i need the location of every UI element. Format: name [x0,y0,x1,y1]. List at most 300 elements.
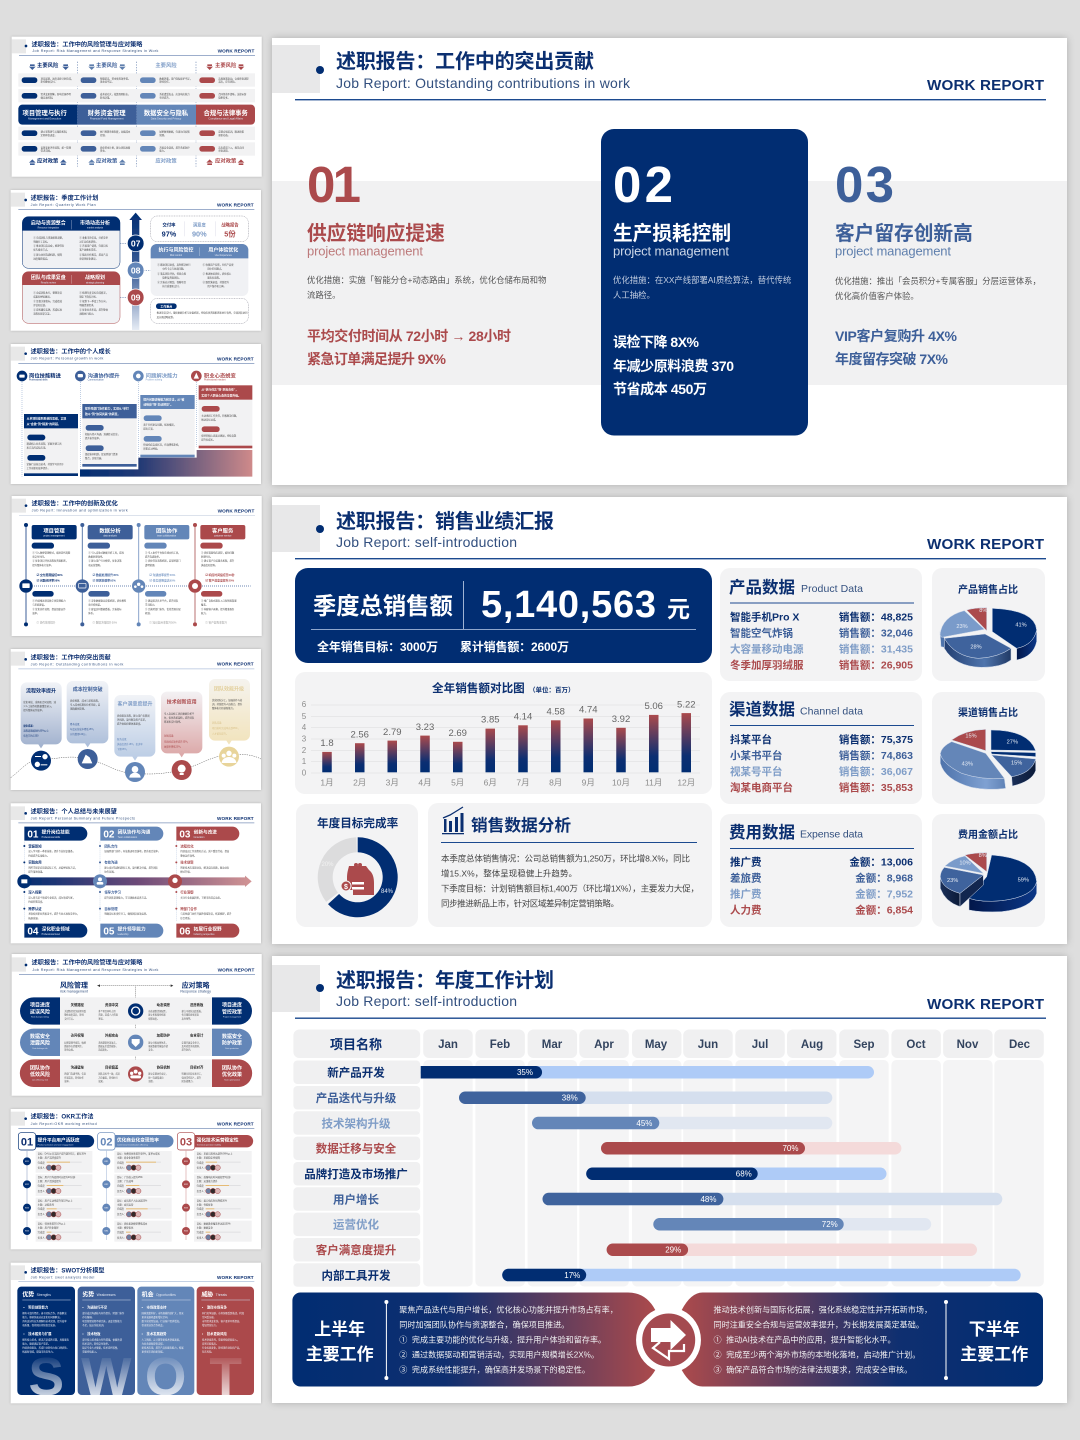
thumbnail: personal summary: 团队协作与沟通 [118,829,151,836]
thumbnail: quarterly work plan: 进度跟踪落实。 [33,256,50,260]
thumbnail: OKR method: 完成度 [38,1230,45,1234]
thumbnail: outstanding contributions: 团队效能升级 [214,685,244,692]
panel: first half main work: 主要工作 [306,1345,374,1364]
thumbnail: SWOT model: • 市场政策支持 [142,1304,167,1309]
thumbnail: innovation and optimization: ☑ 任务透明度达95% [149,579,176,583]
thumbnail: risk management 1: 合规与法律事务 [204,108,248,117]
thumbnail: risk management 2: 项目进度 [222,1002,242,1009]
header block: 述职报告：工作中的突出贡献 [336,49,594,73]
thumbnail: personal growth [11,344,261,484]
bar chart: annual sales: 2 [302,746,307,755]
thumbnail: personal summary: 跨部门合作 [180,906,198,911]
thumbnail: innovation and optimization: WORK REPORT [218,508,254,513]
thumbnail: innovation and optimization: ☑ 数据决策提升50% [93,620,118,624]
gantt bars: 35% [517,1068,533,1077]
thumbnail: personal growth: 动响应”到“主动预见”。 [143,403,173,407]
panel: channel data: 销售额：35,853 [839,781,913,794]
panel: product data: 销售额：31,435 [839,642,913,655]
gantt chart: 用户增长 [333,1192,379,1206]
chart: channel sales share pie: 渠道销售占比 [958,706,1018,719]
thumbnail: SWOT model: 和质量，保持团队持续稳定发展。 [22,1323,57,1327]
thumbnail: risk management 2: 效率。 [64,1079,71,1083]
panel: sales analysis: 同步推进新品上市，针对区域差异制定营销策略。 [441,898,619,908]
thumbnail: SWOT model: 否则可能落后。 [202,1342,218,1346]
thumbnail: quarterly work plan: 评估和反馈。 [33,303,47,307]
thumbnail: innovation and optimization: ☑ 预测准确率92% [93,579,116,583]
thumbnail: OKR method: 主题：模型优化 [117,1225,134,1229]
column 03: project management [835,244,951,258]
gantt chart: 技术架构升级 [322,1116,391,1130]
thumbnail: quarterly work plan: User Experience [215,254,233,257]
thumbnail: quarterly work plan: 流程和知识沉淀。 [33,312,52,316]
thumbnail: SWOT model: 拓展新领域，增强市场竞争力。 [22,1350,55,1354]
gantt chart: Jan [438,1039,458,1051]
panel: channel data: Channel data [800,706,863,718]
thumbnail: innovation and optimization: 项目管理 [43,526,65,534]
thumbnail: outstanding contributions: 系统响应效率提升35%， [164,739,190,743]
thumbnail: OKR method: 目标：优化投放模型降低成本 [117,1221,148,1225]
panel: second half main work: 主要工作 [960,1345,1028,1364]
thumbnail: risk management 1: 有待提升。 [159,95,171,99]
quarterly total card: 累计销售额：2600万 [460,639,569,654]
thumbnail: risk management 2: 外部攻击 [105,1033,119,1038]
thumbnail: quarterly work plan: 客户画像和需求。 [79,248,98,252]
thumbnail: innovation and optimization: ② 建立用户行为模型，优化决策 [88,559,122,563]
thumbnail: OKR method: 02 [100,1136,112,1148]
bar chart: annual sales: 1月 [320,778,334,788]
gantt chart: Aug [801,1039,823,1051]
gantt chart: 数据迁移与安全 [316,1142,397,1156]
panel: expense data: 金额：6,854 [855,904,913,917]
thumbnail: outstanding contributions: 人才留存提升。 [212,731,228,735]
thumbnail: SWOT model: 国家政策利好，市场规模持续扩大，带来 [142,1311,184,1315]
thumbnail: risk management 2: 造成损失。 [98,1048,109,1052]
thumbnail: innovation and optimization: 与系统建设。 [32,603,46,607]
thumbnail: personal summary: 述职报告：个人总结与未来展望 [31,807,117,815]
chart: product sales share pie: 23% [956,624,968,630]
thumbnail: risk management 1: 述职报告：工作中的风险管理与应对策略 [32,40,143,48]
thumbnail: SWOT model: W [81,1348,132,1407]
thumbnail: risk management 2: 沟通壁垒 [71,1064,85,1069]
thumbnail: SWOT model: 能力，能够满足客户需求。 [22,1342,50,1346]
panel: sales analysis: 本季度总体销售情况：公司总销售额为1,250万，环比增8.X%，同比 [441,854,690,864]
thumbnail: risk management 2: Low efficiency risk [32,1078,48,1081]
thumbnail: SWOT model: 威胁 [201,1291,213,1299]
thumbnail: personal growth: 从“会做”到“精通”的跨越。 [27,422,61,426]
thumbnail: SWOT model: 技术快速迭代，需要持续研发投入， [202,1338,239,1342]
thumbnail: risk management 2: Team optimization [224,1078,240,1081]
thumbnail: OKR method: 目标：用户月均使用时长提升20分钟 [38,1175,76,1179]
panel: first half main work: 上半年 [314,1319,365,1339]
thumbnail: risk management 2: 加密防护 [157,1033,171,1038]
thumbnail: innovation and optimization: 体系。 [88,611,95,615]
thumbnail: quarterly work plan: 明确资源需求。 [79,303,96,307]
thumbnail: quarterly work plan: 满意度 [193,222,206,229]
thumbnail: outstanding contributions: 优化服务流程，建立用户反馈闭 [117,714,150,718]
thumbnail: outstanding contributions: 降本成果： [70,722,82,726]
thumbnail: quarterly work plan: 明确分工目标。 [33,239,50,243]
column 01: 流路径。 [307,290,340,300]
thumbnail: OKR method: 负责人： [197,1212,206,1216]
thumbnail: personal summary: 提升落地效果。 [28,870,45,874]
gantt bars: 38% [562,1094,578,1103]
thumbnail: quarterly work plan: 09 [131,293,141,303]
icon: swap arrows in circle [641,1312,697,1368]
bar chart: annual sales: 8月 [549,778,562,788]
panel: channel data: 小某书平台 [730,749,782,762]
thumbnail: risk management 2: 数据安全 [222,1033,242,1040]
thumbnail: personal summary: 05 [103,927,115,938]
thumbnail: OKR method: 完成度 [197,1184,204,1188]
thumbnail: risk management 2: Data protection [225,1047,239,1050]
thumbnail: risk management 2: 应对策略 [182,980,210,989]
thumbnail: innovation and optimization: 提升整体执行效率。 [32,563,53,567]
thumbnail: personal growth: 述职报告：工作中的个人成长 [31,348,111,356]
panel: expense data: 金额：7,952 [855,888,913,901]
thumbnail: quarterly work plan: 推进项目交付，强化数据分析与复盘机制，持续优化资源配置和执行效率，完善团队协同 [157,311,248,315]
thumbnail: personal growth: Problem solving [146,379,163,382]
thumbnail: personal growth: 从“执行任务”到“承担责任”， [201,388,238,392]
header block [272,505,1046,559]
thumbnail: OKR method: 完成度 [38,1160,45,1164]
thumbnail: risk management 1: 执行预算审批制度，加强成本 [100,130,131,134]
bar chart: annual sales: 3.85 [481,714,500,726]
thumbnail: SWOT model: 拥有丰富的经验，善于团队合作，具备解决 [22,1311,67,1315]
thumbnail: quarterly work plan: 97% [162,230,177,239]
thumbnail: innovation and optimization: 数据处理效率。 [88,554,105,558]
thumbnail: outstanding contributions: 环机制，及时解决用户诉求， [117,718,147,722]
thumbnail: personal growth: 整合，实现共赢。 [85,456,104,460]
thumbnail: personal summary: 建立良好沟通机制和工具，及时解决分歧，提升团队 [104,865,159,869]
thumbnail: SWOT model: 具有良好的业务理解和技术实践，提升效率 [22,1319,67,1323]
thumbnail: personal summary: 关注行业发展趋势，了解市场前沿动态。 [180,895,222,899]
thumbnail: risk management 1: 资金。 [100,149,107,153]
thumbnail: personal growth: 保持积极心态面对挑战，持续自我 [201,434,237,438]
thumbnail: innovation and optimization: 透明管理。 [145,563,157,567]
thumbnail: OKR method: KR3 [104,1207,109,1209]
gantt chart: May [645,1039,668,1051]
thumbnail: personal summary: Professional level [42,933,60,936]
panel: product data: 大容量移动电源 [730,642,804,655]
thumbnail: personal summary [11,803,261,943]
thumbnail: innovation and optimization: ① 引入协作平台和在线文档工具， [145,550,181,554]
thumbnail: personal summary: 团队合作 [104,843,118,848]
thumbnail: SWOT model: 项目管理流程不够完善，进度控制能力 [82,1319,123,1323]
thumbnail: OKR method: 主题：用户活跃度提升 [38,1156,62,1160]
gantt chart: Nov [957,1039,979,1051]
thumbnail: OKR method: 优化商业化变现效率 [117,1136,159,1143]
thumbnail: personal growth: 沟通协作提升 [88,371,120,379]
thumbnail: SWOT model: 劣势 [82,1291,94,1299]
thumbnail: personal summary: 掌握新知 [28,843,42,848]
column 01: 供应链响应提速 [307,222,445,245]
thumbnail: SWOT model: 空间受压缩。 [202,1315,216,1319]
panel: expense data: Expense data [800,828,863,840]
thumbnail: personal growth: Communication [88,379,105,382]
thumbnail: quarterly work plan: WORK REPORT [217,203,254,208]
thumbnail: OKR method: 负责人： [117,1166,126,1170]
thumbnail: innovation and optimization: 处理时长。 [201,554,213,558]
thumbnail: OKR method: KR3 [25,1207,30,1209]
thumbnail: risk management 2: 建立多级备份机制 [148,1013,166,1017]
column 02 card: 误检下降 8X% [613,334,700,350]
thumbnail: OKR method: 目标：付费转化率提升至8%，客单价增长 [117,1152,161,1156]
thumbnail: quarterly work plan: 战略执行能力。 [79,312,96,316]
thumbnail: SWOT model: 行业标准变化，影响现有业务和产品， [202,1346,242,1350]
thumbnail: OKR method: 主题：用户转化路径 [38,1225,59,1229]
thumbnail: risk management 2: 提升防护。 [182,1048,192,1052]
chart: product sales share pie: 28% [970,645,982,651]
thumbnail: OKR method: 主题：运维能力提升 [197,1179,218,1183]
thumbnail: SWOT model: 人工智能、云计算等新技术快速发展， [142,1338,181,1342]
thumbnail: OKR method: KR4 [184,1231,189,1233]
gantt chart: Jun [698,1039,718,1051]
thumbnail: risk management 2: 关键路径任务延期导致 [64,1009,87,1013]
thumbnail: OKR method: 主题：性能优化 [197,1202,214,1206]
thumbnail: innovation and optimization: ☑ 客户满意度提升20% [205,579,235,583]
bar chart: annual sales: 4月 [418,778,432,788]
chart: product sales share pie: 产品销售占比 [958,583,1018,596]
thumbnail: risk management 1: 优化资金计划，建立风险准备 [100,145,131,149]
thumbnail: innovation and optimization: ② 完善跨部门协作，优化资源分配 [145,607,181,611]
panel: sales analysis [428,803,712,927]
thumbnail: risk management 1: Management and Execution [28,117,62,121]
chart: expense share pie [932,814,1045,927]
thumbnail: personal summary: 实践应用 [28,860,42,865]
thumbnail: risk management 2: Risk of project delay [31,1016,49,1019]
thumbnail: risk management 2: 团队目标不一致，成员 [98,1072,120,1076]
thumbnail: risk management 2: 及时修复系统漏洞， [182,1044,201,1048]
thumbnail: OKR method: 完成度 [117,1230,125,1234]
thumbnail: SWOT model: O [145,1348,186,1407]
thumbnail: OKR method: 完成度 [38,1184,45,1188]
bar chart: annual sales: 2.56 [350,730,369,740]
thumbnail: personal growth: 问题解决能力 [146,371,178,379]
thumbnail: innovation and optimization: ☑ 知识复用率提升50% [149,620,177,624]
thumbnail: quarterly work plan: 工作重点 [160,303,172,308]
panel: product data: 冬季加厚羽绒服 [730,658,804,671]
gantt chart: 产品迭代与升级 [316,1091,397,1105]
header block: Job Report: Outstanding contributions in work [336,75,631,91]
column 02 card: 年减少原料浪费 370 [613,358,734,374]
thumbnail: personal summary: 技术创新 [180,860,194,865]
donut: annual goal completion: 84% [381,889,394,895]
thumbnail: personal summary: 流程优化 [180,843,194,848]
panel: expense data [720,814,922,927]
thumbnail: outstanding contributions: WORK REPORT [217,662,254,667]
thumbnail: outstanding contributions: 团队成果： [212,721,224,725]
thumbnail: innovation and optimization: 团队协作 [156,526,178,534]
column 01: project management [307,244,423,258]
thumbnail: SWOT model: 增加经营压力。 [202,1323,218,1327]
thumbnail: risk management 2: 目标偏差 [105,1064,119,1069]
thumbnail: outstanding contributions: 优化预算、成本与采购流程， [70,699,100,703]
chart: product sales share pie [932,568,1045,681]
panel: product data: 智能手机Pro X [730,610,799,624]
thumbnail: outstanding contributions: Job Report: Outstanding contributions in work [31,663,124,667]
thumbnail: quarterly work plan: 用户体验优化 [208,247,238,254]
bar chart: annual sales: 6 [302,700,307,709]
panel: expense data: 费用数据 [729,823,795,842]
thumbnail: SWOT model: 述职报告：SWOT分析模型 [31,1266,105,1274]
thumbnail: risk management 1: 项目延期，进度未按计划完成， [41,76,73,80]
thumbnail: quarterly work plan: 成果和经验教训。 [33,294,52,298]
thumbnail: OKR method: 负责人： [117,1212,126,1216]
thumbnail: innovation and optimization: customer service [214,535,232,538]
gantt bars [421,1066,1021,1281]
thumbnail: personal growth: 提升协作效率。 [85,436,101,440]
thumbnail: personal summary: 协作氛围。 [104,870,116,874]
column 03: 03 [835,156,894,213]
thumbnail: personal summary: 与其他部门协作开展跨领域项目，拓宽视野，提升 [180,911,232,915]
thumbnail: OKR method: KR1 [104,1161,108,1163]
thumbnail: risk management 2: Response strategy [180,990,211,994]
panel: product data [720,568,922,681]
thumbnail: risk management 2: 权限管理不规范，敏感 [64,1040,87,1044]
thumbnail: risk management 1: 系统遭受攻击，应急响应能力 [159,92,190,96]
panel: second half main work: 推动技术创新与国际化拓展，强化系统稳定性并开拓新市场， [714,1304,932,1314]
bar chart: annual sales: 4.74 [579,704,598,716]
thumbnail: SWOT model: 存在风险。 [202,1350,214,1354]
thumbnail: risk management 1: 财务资金管理 [88,108,126,117]
thumbnail: innovation and optimization: 效率。 [32,611,39,615]
thumbnail: personal growth: 从单项技能到系统性思维，实现 [27,416,66,420]
bar chart: annual sales: 1.8 [320,738,334,749]
bar chart: annual sales: 6月 [484,778,497,788]
thumbnail: risk management 2: 述职报告：工作中的风险管理与应对策略 [32,959,143,967]
thumbnail: innovation and optimization: 和交付时间。 [32,554,46,558]
thumbnail: innovation and optimization: ② 优化协作流程，提高组织运作 [32,607,66,611]
thumbnail: OKR method: 主题：商业化效率提升 [117,1156,141,1160]
thumbnail: quarterly work plan: ① 跟进项目进度，及时解决执行 [157,263,191,267]
thumbnail: quarterly work plan: ① 收集市场信息，分析竞争 [79,235,109,239]
thumbnail: OKR method: KR2 [184,1184,188,1186]
thumbnail: risk management 1: 合同条款不清晰，法律纠纷 [218,92,247,96]
thumbnail: quarterly work plan: Risk control [170,254,183,257]
quarterly total card: 5,140,563 [481,584,656,626]
thumbnail: risk management 2: 安全审计 [190,1033,204,1038]
thumbnail: quarterly work plan: 战略规划 [85,274,105,281]
thumbnail: innovation and optimization: ① 引入敏捷管理模式，缩短迭代周期 [32,550,71,554]
panel: second half main work [682,1292,1043,1386]
header block: WORK REPORT [927,77,1045,94]
chart: channel sales share pie: 15% [965,734,977,740]
thumbnail: quarterly work plan: ① 收集用户反馈，分析产品使 [203,263,234,267]
bar chart: annual sales: 2.69 [448,728,467,739]
thumbnail: innovation and optimization: 和运营策略。 [88,563,102,567]
panel: second half main work: ② 完成至少两个海外市场的本地化落地，启动推广计划。 [714,1350,920,1360]
thumbnail: risk management 2: 建立分级加密体系， [148,1040,168,1044]
thumbnail: SWOT model: Opportunities [156,1293,176,1297]
thumbnail: quarterly work plan: ③ 优化业务布局，提升整体 [79,308,109,312]
thumbnail: risk management 2: 目标对齐 [190,1064,204,1069]
column 02 card: 02 [613,156,673,213]
thumbnail: SWOT model: • 激烈市场竞争 [202,1304,228,1309]
icon: rising bar chart [442,807,464,834]
gantt bars: 68% [736,1170,752,1179]
bar chart: annual sales: 5 [302,712,307,721]
thumbnail: personal summary: 深化职业领域 [42,926,70,933]
thumbnail: personal growth: 实现个人职业心态的全面升级。 [201,393,241,397]
thumbnail: outstanding contributions: 项目按时完成率达到95%， [212,726,240,730]
thumbnail: risk management 1: 预算超支，资金使用效率低。 [100,76,130,80]
thumbnail: SWOT model: 机会 [142,1291,154,1299]
thumbnail: outstanding contributions: 优化审批、采购和合同流程，减 [23,700,57,704]
header block: Job Report: self-introduction [336,534,517,550]
thumbnail: SWOT model: • 沟通技巧不足 [82,1304,108,1309]
thumbnail: OKR method: 主题：功能迭代 [38,1202,55,1206]
panel: product data: Product Data [801,583,863,595]
column 03: VIP客户复购升 4X% [835,328,958,344]
thumbnail: OKR method: 主题：广告效率 [117,1179,134,1183]
thumbnail: OKR method: 负责人： [197,1166,206,1170]
gantt chart: 内部工具开发 [322,1268,391,1282]
thumbnail: quarterly work plan: ③ 建立协同沟通机制，保障 [33,252,63,256]
donut: annual goal completion: 20% [321,862,334,868]
thumbnail: SWOT model [11,1263,261,1407]
thumbnail: risk management 1: 定期合规培训，跟进政策 [218,130,245,134]
thumbnail: quarterly work plan: ② 规划下一季度工作方向， [79,299,108,303]
bar chart: annual sales: 2月 [353,778,366,788]
thumbnail: risk management 2 [12,954,262,1096]
thumbnail: risk management 1: 需求变更频繁，影响范围不明 [41,92,72,96]
gantt bars: 70% [782,1144,799,1153]
thumbnail: risk management 2: 防护政策 [222,1040,242,1047]
thumbnail: risk management 2: Job Report: Risk Management and Response Strategies in Work [32,968,159,972]
thumbnail: personal growth: 工作创新和效率提升。 [27,466,50,470]
gantt chart: 客户满意度提升 [316,1243,397,1257]
column 03 [835,156,1041,367]
bar chart: annual sales: 2.79 [383,727,402,738]
panel: first half main work: 同时加强团队协作与资源整合，确保项目推进。 [399,1320,569,1330]
thumbnail: risk management 1: 主要风险 [37,61,59,69]
thumbnail: OKR method: 目标：转化率提升10%以上 [38,1221,66,1225]
thumbnail: quarterly work plan: Job Report: Quarterly Work Plan [31,203,96,207]
donut: annual goal completion [296,804,418,927]
thumbnail: personal summary: 持续提升实战能力。 [28,853,49,857]
panel: product data: 销售额：48,825 [839,610,913,624]
thumbnail: risk management 2: 整体进度滞后，影响 [64,1013,84,1017]
thumbnail: quarterly work plan: 用户留存和口碑。 [207,284,226,288]
thumbnail: risk management 1: 法务提前介入，规范合同 [218,145,245,149]
thumbnail: personal growth: 快速响应突发状况，有效降低影响， [143,443,181,447]
panel: first half main work: 聚焦产品迭代与用户增长，优化核心功能并提升市场占有率， [399,1304,618,1314]
thumbnail: outstanding contributions: 少人工操作和数据重复录入， [23,704,54,708]
quarterly total card: 季度总销售额 [313,593,453,619]
thumbnail: risk management 1: 数据安全与隐私 [144,108,189,117]
thumbnail: SWOT model: • 技术发展趋势 [142,1331,167,1336]
thumbnail: risk management 1: 影响整体交付。 [41,80,57,84]
thumbnail: personal growth: 提升和成长。 [201,438,215,442]
thumbnail: personal summary: 跨界认证 [28,906,42,911]
gantt chart: Feb [490,1039,510,1051]
thumbnail: outstanding contributions [11,649,261,790]
header block: 述职报告：销售业绩汇报 [336,510,554,533]
thumbnail: innovation and optimization: project management [43,535,65,538]
chart: channel sales share pie: 27% [1007,740,1018,746]
thumbnail: risk management 1: Job Report: Risk Management and Response Strategies in Work [32,49,159,53]
thumbnail: risk management 2: 项目进度 [30,1002,50,1009]
panel: second half main work: ③ 确保产品符合市场的法律法规要求，完成安全审核。 [714,1364,912,1374]
thumbnail: personal growth: 岗位技能精进 [29,371,62,379]
thumbnail: quarterly work plan: Results review [41,281,56,284]
thumbnail: quarterly work plan [11,190,261,331]
thumbnail: innovation and optimization: 覆盖。 [201,603,208,607]
gantt bars: 17% [564,1271,580,1280]
thumbnail: OKR method: KR2 [104,1184,108,1186]
thumbnail: quarterly work plan: 用中的问题点。 [207,267,224,271]
thumbnail: risk management 2: 优化政策 [222,1071,242,1078]
